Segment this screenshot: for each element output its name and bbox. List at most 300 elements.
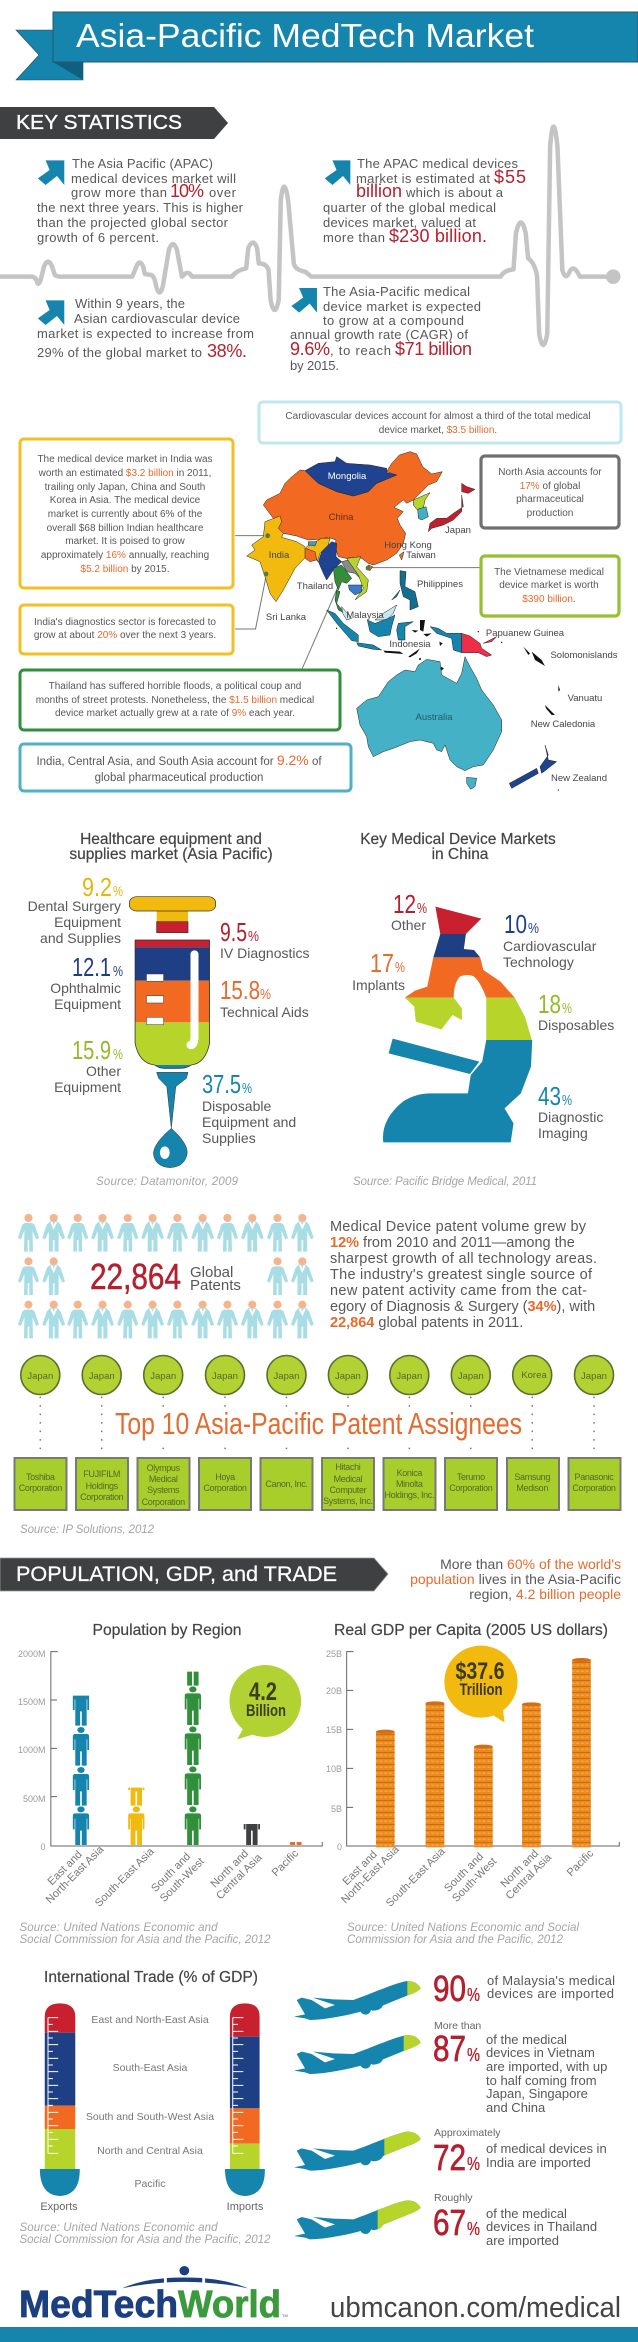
stat: market size: $55 — [494, 167, 526, 187]
chart: GDP per capita: North and — [498, 1848, 541, 1890]
patent assignee companies: Canon, Inc. — [265, 1479, 308, 1489]
title banner — [16, 12, 638, 80]
callout: Thailand: device market actually grew at a rate of 9% each year. — [55, 708, 295, 719]
chart: population by region: 500M — [23, 1794, 46, 1804]
labels: syringe chart: % — [113, 963, 123, 980]
country: Hainan — [366, 565, 373, 571]
chart: population by region: 1500M — [18, 1697, 46, 1707]
labels: syringe chart: % — [242, 1080, 252, 1097]
country: New Zealand — [509, 745, 557, 788]
chart: population by region: East and — [46, 1849, 85, 1888]
chart: population by region: South and — [149, 1851, 193, 1895]
text: patent volume: sharpest growth of all technology areas. — [330, 1251, 597, 1267]
text: population share: More than 60% of the world's — [440, 1556, 621, 1572]
map labels: Taiwan — [406, 550, 436, 561]
chart: population by region: Billion — [246, 1701, 286, 1720]
callout: India market: overall $68 billion Indian healthcare — [47, 523, 204, 534]
callout: pharmaceutical production: global pharmaceutical production — [95, 772, 263, 784]
map labels: Hong Kong — [384, 540, 432, 551]
patent assignee countries: Japan — [396, 1371, 422, 1382]
stat: market size: The APAC medical devices — [357, 156, 518, 171]
source: syringe: Source: Datamonitor, 2009 — [96, 1176, 239, 1188]
stat: India imports: 72 — [433, 2137, 466, 2178]
labels: syringe chart: % — [260, 986, 271, 1003]
patent assignee companies: Corporation — [572, 1483, 616, 1493]
labels: syringe chart: IV Diagnostics — [220, 945, 309, 961]
map labels: Malaysia — [346, 610, 384, 621]
trade chart labels: East and North-East Asia — [91, 2014, 209, 2026]
text: patent volume: 22,864 global patents in 2011. — [330, 1315, 523, 1331]
chart: population by region: 2000M — [18, 1649, 46, 1659]
patent assignee countries: Japan — [581, 1371, 607, 1382]
chart: GDP per capita: North-East Asia — [339, 1843, 402, 1906]
stat: global patents: 22,864 — [90, 1256, 181, 1297]
labels: microscope chart: % — [395, 959, 405, 976]
callout: pharmaceutical production: India, Central Asia, and South Asia account for 9.2% of — [36, 752, 322, 768]
stat: market size: billion — [356, 181, 402, 201]
stat: APAC growth — [37, 156, 244, 245]
labels: syringe chart: Equipment — [54, 914, 121, 930]
callout: North Asia — [481, 456, 619, 528]
trade chart labels: South-East Asia — [113, 2062, 188, 2074]
chart: GDP per capita: South-West — [450, 1856, 499, 1905]
logo: MedTechWorld — [19, 2266, 288, 2326]
stat: APAC growth: grow more than — [71, 185, 167, 200]
coin columns — [347, 1646, 619, 1847]
stat: India imports: % — [467, 2154, 480, 2174]
source: GDP: Commission for Asia and the Pacific, 2012 — [347, 1934, 564, 1946]
country: Cambodia — [348, 585, 362, 595]
callout: India market: approximately 16% annually, reaching — [41, 550, 209, 561]
plane: Thailand 67% — [294, 2200, 421, 2239]
stat: Vietnam imports: Japan, Singapore — [486, 2086, 588, 2101]
stat: CAGR: device market is expected — [323, 299, 481, 314]
key statistics heading: KEY STATISTICS — [16, 112, 182, 134]
chart: GDP per capita: Central Asia — [504, 1851, 555, 1902]
stat: market size: devices market, valued at — [323, 215, 476, 230]
pictogram: patents people — [18, 1214, 314, 1338]
stat: CAGR: The Asia-Pacific medical — [323, 284, 470, 299]
labels: syringe chart: Other — [86, 1063, 121, 1079]
country: Thailand — [333, 565, 352, 613]
source: population: Social Commission for Asia and the Pacific, 2012 — [20, 1934, 271, 1946]
labels: syringe chart: 15.9 — [72, 1035, 111, 1065]
source: population: Source: United Nations Economic and — [20, 1922, 218, 1934]
country: Papua New Guinea — [462, 633, 497, 657]
text: population share: population lives in the Asia-Pacific — [410, 1571, 621, 1587]
country: Malaysia — [342, 605, 397, 620]
patent assignee companies: Olympus — [147, 1463, 181, 1473]
stat: market size: quarter of the global medical — [323, 200, 496, 215]
labels: microscope chart: 18 — [538, 989, 561, 1019]
country: Bhutan — [308, 542, 317, 546]
patent assignee companies — [14, 1458, 620, 1510]
labels: syringe chart: Equipment — [54, 996, 121, 1012]
stat: APAC growth: over — [209, 185, 237, 200]
labels: microscope chart: 12 — [393, 889, 416, 919]
connector lines — [235, 536, 480, 668]
map labels: Australia — [416, 712, 453, 723]
plane: Vietnam 87% — [294, 2035, 421, 2074]
text: patent volume: Medical Device patent volume grew by — [330, 1219, 587, 1235]
country: Taiwan — [399, 552, 404, 560]
heartbeat line — [0, 127, 621, 345]
text: patent volume: 12% from 2010 and 2011—among the — [330, 1235, 575, 1251]
text: patent volume: egory of Diagnosis & Surgery (34%), with — [330, 1299, 595, 1315]
patent assignee companies: Medical — [149, 1474, 178, 1484]
country: Japan — [428, 483, 475, 532]
country: Myanmar — [318, 542, 342, 580]
callout: Vietnam: The Vietnamese medical — [494, 567, 604, 578]
map labels: Papuanew Guinea — [486, 628, 565, 639]
icons: planes — [294, 1981, 421, 2239]
text: patent volume: new patent activity came from the cat- — [330, 1283, 587, 1299]
labels: microscope chart: Diagnostic — [538, 1109, 603, 1125]
labels: syringe chart: % — [113, 1046, 123, 1063]
stat: cardiovascular share: 29% of the global market to — [37, 345, 202, 360]
source: patents: Source: IP Solutions, 2012 — [20, 1524, 155, 1536]
callout: India market: The medical device market in India was — [37, 454, 213, 465]
stat: Vietnam imports: More than — [434, 2020, 481, 2032]
trade chart labels — [40, 2014, 264, 2213]
callout: India market: market is currently about 6% of the — [48, 509, 203, 520]
map labels: China — [329, 512, 354, 523]
labels: syringe chart: 37.5 — [202, 1069, 241, 1099]
patent assignee countries: Japan — [27, 1371, 53, 1382]
patent assignee companies: Minolta — [396, 1479, 423, 1489]
population heading: POPULATION, GDP, and TRADE — [16, 1563, 337, 1586]
patent assignee companies: Systems — [147, 1485, 180, 1495]
callout: India diagnostics: India's diagnostics sector is forecasted to — [34, 617, 216, 628]
stat: Thailand imports: % — [467, 2219, 480, 2239]
stat: market size: $230 billion. — [389, 226, 487, 246]
callout: India market: worth an estimated $3.2 billion in 2011, — [38, 468, 211, 479]
country: South Korea — [418, 507, 428, 520]
labels: microscope chart: Other — [391, 917, 426, 933]
patent assignee companies: Systems, Inc. — [323, 1496, 373, 1506]
map labels — [266, 471, 618, 784]
patent assignee companies: Hitachi — [335, 1462, 361, 1472]
chart: GDP per capita: 25B — [326, 1649, 342, 1659]
chart: GDP per capita: Pacific — [565, 1847, 596, 1879]
chart: population by region: South-East Asia — [93, 1845, 157, 1909]
country: Philippines — [392, 571, 418, 610]
trade chart labels: Exports — [40, 2201, 78, 2213]
chart: GDP per capita: 10B — [326, 1764, 342, 1774]
country: Vietnam — [347, 557, 368, 600]
chart: GDP per capita — [326, 1646, 619, 1909]
callout: India market: $5.2 billion by 2015. — [81, 564, 169, 575]
chart: GDP per capita: South and — [442, 1851, 486, 1895]
chart: syringe — [129, 897, 216, 1168]
labels: microscope chart: Implants — [352, 977, 405, 993]
callout: Thailand: Thailand has suffered horrible floods, a political coup and — [49, 681, 301, 692]
labels: syringe chart: Dental Surgery — [28, 898, 121, 914]
chart title: healthcare equipment — [69, 831, 273, 863]
labels: microscope chart: 17 — [370, 948, 394, 978]
stat: Thailand imports: are imported — [486, 2233, 559, 2248]
labels: syringe chart: % — [113, 883, 123, 900]
chart: population by region: Central Asia — [214, 1851, 265, 1902]
dotted connectors — [40, 1397, 594, 1455]
callout: cardiovascular devices — [259, 402, 621, 443]
stat: APAC growth: 10% — [170, 181, 204, 201]
callout: North Asia: North Asia accounts for — [498, 467, 602, 478]
labels: syringe chart: 15.8 — [220, 975, 260, 1005]
plane: India 72% — [294, 2132, 421, 2171]
text: population share — [410, 1556, 621, 1602]
stat: Thailand imports: of the medical — [486, 2206, 567, 2221]
chart: population by region: 0 — [40, 1842, 46, 1852]
callout: Vietnam: $390 billion. — [522, 594, 576, 605]
callout: cardiovascular devices: device market, $3.5 billion. — [379, 425, 497, 436]
chart: GDP per capita: Trillion — [460, 1680, 502, 1699]
patent assignee countries: Japan — [458, 1371, 484, 1382]
source: trade — [20, 2222, 271, 2246]
patent assignee companies: Holdings, Inc. — [384, 1490, 434, 1500]
country: India — [247, 516, 330, 602]
patent assignee companies: Medical — [334, 1474, 363, 1484]
stat: cardiovascular share: Asian cardiovascular device — [74, 311, 240, 326]
icon: growth arrows — [38, 160, 350, 325]
patent assignee companies: Konica — [397, 1468, 422, 1478]
map labels: Sri Lanka — [266, 612, 307, 623]
stat: cardiovascular share: Within 9 years, the — [75, 296, 185, 311]
country: China — [263, 452, 442, 565]
stat: Vietnam imports: are imported, with up — [486, 2059, 607, 2074]
source: population — [20, 1922, 271, 1946]
labels: syringe chart: Technical Aids — [220, 1004, 309, 1020]
callout: North Asia: pharmaceutical — [516, 494, 584, 505]
plane: Malaysia 90% — [294, 1981, 421, 2020]
patent assignee countries: Japan — [335, 1371, 361, 1382]
chart title: population: Population by Region — [92, 1622, 242, 1639]
source: microscope: Source: Pacific Bridge Medical, 2011 — [353, 1176, 537, 1188]
stat: APAC growth: The Asia Pacific (APAC) — [72, 156, 213, 171]
map labels: Thailand — [297, 581, 333, 592]
map labels: New Caledonia — [531, 719, 596, 730]
stat: global patents: Global — [190, 1264, 233, 1281]
chart: GDP per capita: 0 — [337, 1842, 342, 1852]
stat: Malaysia imports: devices are imported — [487, 1986, 614, 2001]
chart title: GDP: Real GDP per Capita (2005 US dollars) — [334, 1622, 608, 1639]
trade chart labels: Imports — [227, 2201, 264, 2213]
stat: CAGR: $71 billion — [395, 339, 472, 359]
map labels: Mongolia — [328, 471, 367, 482]
chart title: China markets: in China — [432, 846, 489, 863]
text: patent volume: The industry's greatest single source of — [330, 1267, 593, 1283]
chart: population by region — [18, 1647, 322, 1909]
labels: microscope chart: % — [417, 900, 427, 917]
labels: microscope chart: Cardiovascular — [503, 938, 597, 954]
stat: market size — [323, 156, 526, 246]
stat: APAC growth: growth of 6 percent. — [37, 230, 159, 245]
connector dots — [264, 533, 370, 582]
callout: India market — [20, 439, 233, 588]
callout: India diagnostics — [20, 605, 233, 654]
stat: CAGR: by 2015. — [290, 358, 339, 373]
labels: syringe chart: 9.5 — [220, 917, 247, 947]
country: Mongolia — [305, 457, 397, 496]
stat: Malaysia imports: % — [467, 1985, 480, 2005]
patent assignee companies: Corporation — [449, 1483, 493, 1493]
chart: population by region: 1000M — [18, 1745, 46, 1755]
labels: syringe chart: Equipment and — [202, 1114, 296, 1130]
map: Indonesia and Oceania — [327, 610, 560, 791]
callout: India market: Korea in Asia. The medical device — [50, 495, 201, 506]
stat: cardiovascular share: market is expected to increase from — [37, 326, 254, 341]
chart: population by region: North-East Asia — [44, 1843, 107, 1906]
labels: syringe chart: Supplies — [202, 1130, 256, 1146]
country: North Korea — [413, 493, 430, 509]
stat: Malaysia imports: of Malaysia's medical — [487, 1973, 615, 1988]
callout: pharmaceutical production — [20, 744, 351, 791]
stat: CAGR: annual growth rate (CAGR) of — [290, 327, 468, 342]
patent assignee countries: Korea — [521, 1370, 547, 1381]
labels: syringe chart: Equipment — [54, 1079, 121, 1095]
stat: APAC growth: than the projected global sector — [37, 215, 229, 230]
patent assignee countries: Japan — [212, 1371, 238, 1382]
map labels: Philippines — [417, 579, 463, 590]
patent assignee companies: Terumo — [457, 1472, 485, 1482]
website url: ubmcanon.com/medical — [330, 2292, 621, 2324]
stat: CAGR: 9.6% — [290, 339, 330, 359]
labels: microscope chart: 43 — [538, 1081, 561, 1111]
small islands — [336, 620, 560, 791]
chart: GDP per capita: East and — [341, 1849, 380, 1888]
stat: Vietnam imports: and China — [486, 2100, 546, 2115]
map labels: Vanuatu — [568, 693, 602, 704]
trade chart labels: Pacific — [135, 2178, 165, 2190]
stat: Vietnam imports: to half coming from — [486, 2073, 597, 2088]
map labels: India — [269, 550, 290, 561]
chart title: China markets: Key Medical Device Markets — [360, 831, 556, 848]
callout: cardiovascular devices: Cardiovascular devices account for almost a third of the total medical — [285, 411, 591, 422]
patent assignee countries: Japan — [89, 1371, 115, 1382]
stat: Vietnam imports: 87 — [433, 2028, 466, 2069]
country: Indonesia — [327, 610, 462, 653]
stat: Vietnam imports — [433, 2020, 607, 2115]
chart: trade thermometers — [40, 2003, 265, 2196]
chart: GDP per capita: 5B — [331, 1804, 342, 1814]
labels: microscope chart — [352, 889, 614, 1141]
trade chart labels: North and Central Asia — [97, 2145, 203, 2157]
stat: cardiovascular share: 38%. — [207, 341, 247, 361]
labels: syringe chart — [28, 872, 309, 1146]
stat: India imports: of medical devices in — [486, 2141, 607, 2156]
map labels: Japan — [445, 525, 471, 536]
labels: syringe chart: 12.1 — [72, 952, 111, 982]
chart: population by region: South-West — [158, 1856, 207, 1905]
trade chart labels: South and South-West Asia — [86, 2111, 214, 2123]
source: GDP: Source: United Nations Economic and Social — [347, 1922, 579, 1934]
stat: APAC growth: medical devices market will — [71, 171, 236, 186]
map labels: Indonesia — [389, 639, 431, 650]
logo: MedTechWorld: MedTech — [19, 2284, 178, 2326]
map: Asia north — [247, 452, 475, 620]
chart: population by region: Pacific — [270, 1847, 301, 1879]
labels: microscope chart: Disposables — [538, 1017, 614, 1033]
chart title: healthcare equipment: Healthcare equipment and — [80, 831, 262, 848]
patent assignee companies: FUJIFILM — [83, 1469, 120, 1479]
stat: India imports: India are imported — [486, 2155, 591, 2170]
callout: India market: market. It is poised to grow — [65, 536, 186, 547]
patent assignee companies: Medison — [516, 1483, 548, 1493]
stat: Thailand imports — [433, 2192, 597, 2248]
country: Laos — [342, 560, 362, 580]
labels: syringe chart: Disposable — [202, 1098, 271, 1114]
callout: Vietnam — [481, 556, 619, 616]
pictogram columns — [51, 1647, 322, 1846]
patent assignee companies: Toshiba — [26, 1472, 55, 1482]
patent assignee companies: Corporation — [203, 1483, 247, 1493]
logo: MedTechWorld: TM — [282, 2313, 288, 2318]
stat: Thailand imports: devices in Thailand — [486, 2219, 597, 2234]
stat: Malaysia imports: 90 — [433, 1968, 466, 2009]
stat: CAGR: to grow at a compound — [323, 313, 464, 328]
chart: microscope — [383, 907, 532, 1142]
logo: MedTechWorld: World — [178, 2284, 281, 2326]
patent assignee companies: Panasonic — [575, 1472, 614, 1482]
country: Australia — [357, 657, 502, 789]
patent assignee countries — [21, 1356, 614, 1394]
stat: Vietnam imports: % — [467, 2045, 480, 2065]
callout: India market: trailing only Japan, China and South — [45, 482, 205, 493]
stat: cardiovascular share — [37, 296, 254, 361]
patent assignee countries: Japan — [274, 1371, 299, 1382]
labels: syringe chart: 9.2 — [82, 872, 112, 902]
map labels: Solomonislands — [550, 650, 618, 661]
source: trade: Social Commission for Asia and the Pacific, 2012 — [20, 2234, 271, 2246]
chart: GDP per capita: South-East Asia — [384, 1845, 448, 1909]
stat: Vietnam imports: devices in Vietnam — [486, 2045, 595, 2060]
stat: India imports — [433, 2127, 607, 2178]
patent assignee companies: Corporation — [80, 1492, 124, 1502]
stat: APAC growth: the next three years. This is higher — [37, 200, 244, 215]
labels: microscope chart: % — [528, 920, 539, 937]
title banner: Asia-Pacific MedTech Market — [76, 17, 534, 54]
stat: Malaysia imports — [433, 1968, 615, 2009]
callout: North Asia: 17% of global — [520, 481, 580, 492]
text: patent volume — [330, 1219, 597, 1331]
text: population share: region, 4.2 billion people — [469, 1586, 621, 1602]
patent assignee countries: Japan — [150, 1371, 176, 1382]
patent assignee companies: Computer — [330, 1485, 367, 1495]
stat: CAGR: , to reach — [330, 343, 391, 358]
callout: Vietnam: device market is worth — [499, 580, 599, 591]
source: GDP — [347, 1922, 579, 1946]
stat: India imports: Approximately — [434, 2127, 501, 2139]
patent assignee companies: Holdings — [86, 1481, 119, 1491]
chart: population by region: 4.2 — [249, 1678, 277, 1706]
callout: Thailand: months of street protests. Nonetheless, the $1.5 billion medical — [36, 695, 314, 706]
stat: market size: market is estimated at — [356, 171, 490, 186]
stat: market size: which is about a — [405, 185, 504, 200]
stat: global patents: Patents — [190, 1277, 241, 1294]
stat: Thailand imports: 67 — [433, 2202, 466, 2243]
labels: microscope chart: 10 — [504, 909, 527, 939]
chart title: trade: International Trade (% of GDP) — [44, 1969, 258, 1986]
country: Bangladesh — [305, 548, 317, 562]
chart: GDP per capita: 20B — [326, 1686, 342, 1696]
map labels: New Zealand — [551, 773, 607, 784]
labels: microscope chart: % — [562, 1000, 572, 1017]
labels: microscope chart: % — [562, 1092, 572, 1109]
footer bar — [0, 2327, 638, 2342]
stat: market size: more than — [323, 230, 385, 245]
labels: syringe chart: and Supplies — [40, 930, 121, 946]
labels: microscope chart: Technology — [503, 954, 574, 970]
